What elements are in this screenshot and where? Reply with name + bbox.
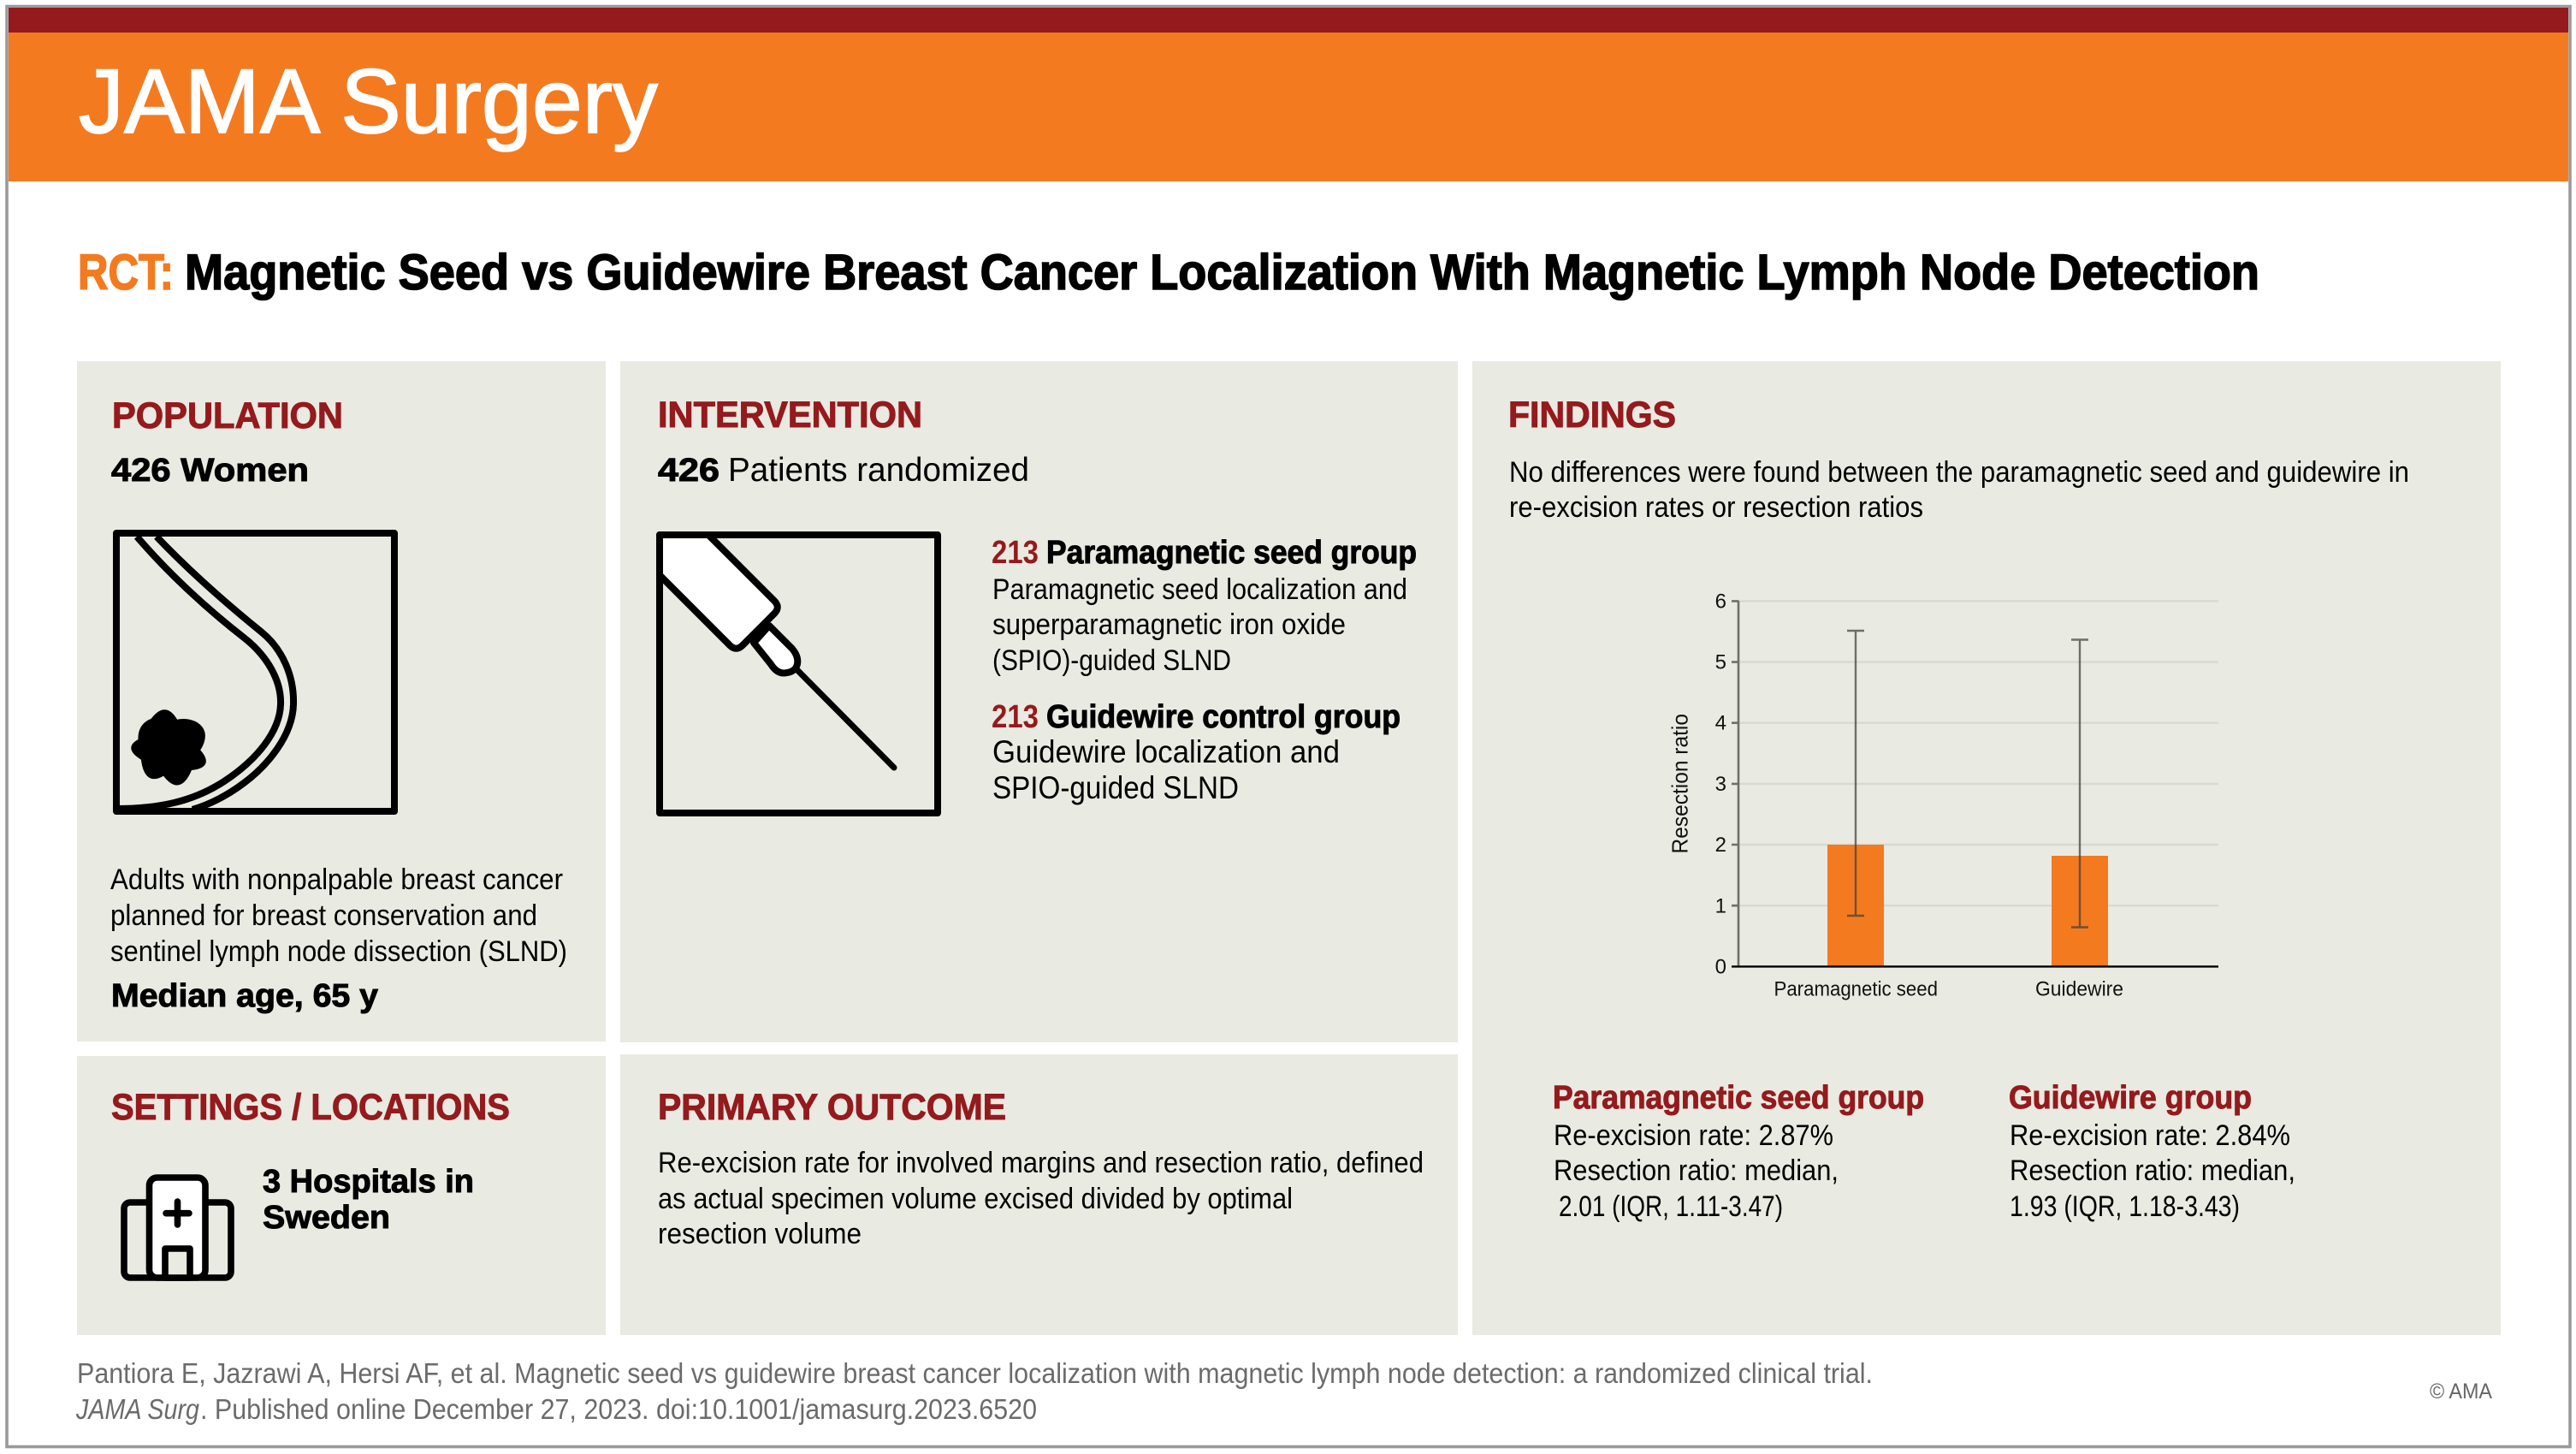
- guidewire arm: SPIO-guided SLND: [992, 770, 1239, 805]
- x axis: [1732, 966, 2218, 1001]
- guidewire arm: Guidewire control group: [1046, 699, 1401, 735]
- paramagnetic seed arm: 213: [992, 535, 1039, 571]
- guidewire arm: Guidewire localization and: [992, 734, 1340, 769]
- icon: breast with tumor: [116, 533, 394, 811]
- bar chart: resection ratio: [1667, 591, 2218, 1001]
- paramagnetic seed arm: (SPIO)-guided SLND: [992, 644, 1231, 677]
- results: guidewire group: [2009, 1080, 2295, 1223]
- x axis: Paramagnetic seed: [1774, 977, 1938, 1001]
- hospitals text: [263, 1164, 474, 1236]
- title: Magnetic Seed vs Guidewire Breast Cancer Localization With Magnetic Lymph Node Detection: [185, 245, 2259, 300]
- panel: primary outcome: [620, 1054, 1458, 1335]
- outcome description: [658, 1147, 1424, 1250]
- paramagnetic seed arm: Paramagnetic seed localization and: [992, 573, 1407, 606]
- title: RCT:: [78, 245, 174, 300]
- y axis: 3: [1715, 773, 1726, 796]
- paramagnetic seed arm: superparamagnetic iron oxide: [992, 608, 1346, 641]
- results: paramagnetic seed group: Resection ratio: median,: [1554, 1154, 1839, 1187]
- panel: intervention: [620, 361, 1458, 1042]
- paramagnetic seed arm: Paramagnetic seed group: [1046, 535, 1417, 571]
- heading: population: POPULATION: [112, 395, 343, 436]
- heading: primary outcome: PRIMARY OUTCOME: [658, 1087, 1006, 1128]
- findings summary: No differences were found between the paramagnetic seed and guidewire in: [1509, 456, 2409, 489]
- guidewire arm: [992, 699, 1401, 805]
- hospitals text: 3 Hospitals in: [263, 1164, 474, 1200]
- citation: [75, 1357, 1873, 1425]
- header banner: [9, 8, 2568, 181]
- y axis: Resection ratio: [1667, 714, 1692, 854]
- y axis: 5: [1715, 650, 1726, 674]
- heading: intervention: INTERVENTION: [658, 395, 922, 436]
- outcome description: resection volume: [658, 1218, 862, 1250]
- findings summary: re-excision rates or resection ratios: [1509, 491, 1923, 524]
- population description: Adults with nonpalpable breast cancer: [110, 863, 563, 896]
- citation: . Published online December 27, 2023. doi:10.1001/jamasurg.2023.6520: [200, 1393, 1037, 1425]
- y axis: 1: [1715, 895, 1726, 917]
- outcome description: as actual specimen volume excised divided by optimal: [658, 1183, 1293, 1215]
- paramagnetic seed arm: [992, 535, 1417, 677]
- results: guidewire group: Resection ratio: median,: [2010, 1154, 2295, 1187]
- citation: JAMA Surg: [75, 1393, 200, 1425]
- bars: [1827, 845, 2108, 966]
- y axis: [1667, 591, 1738, 979]
- results: paramagnetic seed group: [1553, 1080, 1924, 1223]
- results: guidewire group: Guidewire group: [2009, 1080, 2252, 1116]
- icon: syringe: [660, 535, 938, 813]
- citation: Pantiora E, Jazrawi A, Hersi AF, et al. Magnetic seed vs guidewire breast cancer localization with magnetic lymph node detection: a randomized clinical trial.: [77, 1357, 1873, 1389]
- panel: settings and locations: [77, 1056, 606, 1335]
- results: guidewire group: Re-excision rate: 2.84%: [2010, 1119, 2290, 1152]
- y axis: 0: [1715, 955, 1726, 979]
- journal name: JAMA Surgery: [79, 50, 658, 152]
- outcome description: Re-excision rate for involved margins and resection ratio, defined: [658, 1147, 1424, 1179]
- population description: [110, 863, 567, 968]
- population description: planned for breast conservation and: [110, 899, 537, 932]
- y axis: 6: [1715, 591, 1726, 613]
- results: paramagnetic seed group: Re-excision rate: 2.87%: [1554, 1119, 1833, 1152]
- randomized count: Patients randomized: [728, 452, 1029, 489]
- results: paramagnetic seed group: 2.01 (IQR, 1.11-3.47): [1559, 1190, 1783, 1223]
- randomized count: 426: [658, 453, 720, 489]
- y axis: 2: [1715, 834, 1726, 857]
- hospitals text: Sweden: [263, 1200, 390, 1236]
- population description: sentinel lymph node dissection (SLND): [110, 935, 567, 968]
- heading: findings: FINDINGS: [1508, 395, 1676, 436]
- x axis: Guidewire: [2035, 977, 2123, 1001]
- findings summary: [1509, 456, 2409, 524]
- results: guidewire group: 1.93 (IQR, 1.18-3.43): [2010, 1190, 2240, 1223]
- guidewire arm: 213: [992, 699, 1039, 735]
- results: paramagnetic seed group: Paramagnetic seed group: [1553, 1080, 1924, 1116]
- population count: 426 Women: [111, 453, 309, 489]
- icon: hospital: [124, 1178, 231, 1278]
- panel: population: [77, 361, 606, 1042]
- median age: Median age, 65 y: [111, 978, 378, 1014]
- error bars: [1847, 631, 2088, 928]
- copyright: © AMA: [2430, 1380, 2492, 1404]
- panel: findings: [1472, 361, 2501, 1335]
- heading: settings: SETTINGS / LOCATIONS: [111, 1087, 510, 1128]
- y axis: 4: [1715, 712, 1726, 734]
